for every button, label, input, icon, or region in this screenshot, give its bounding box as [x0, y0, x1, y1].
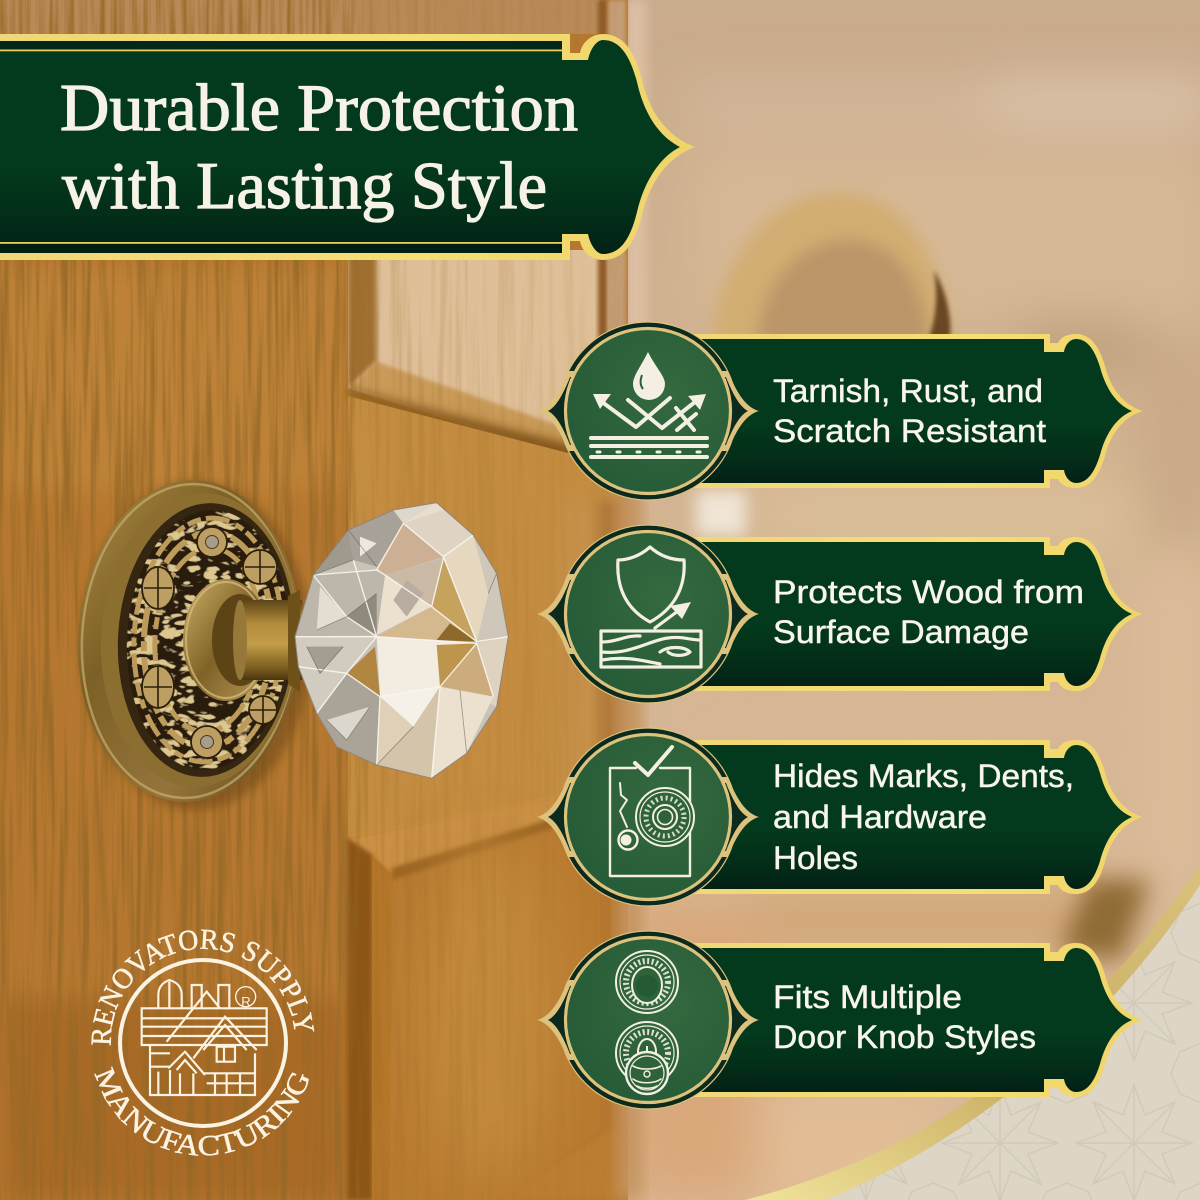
title banner [0, 34, 695, 260]
text 4 [773, 979, 1036, 1055]
crystal knob facets [295, 503, 508, 778]
text 3: and Hardware [773, 799, 987, 835]
feature 3: hides marks [537, 728, 1143, 906]
banner 2 [690, 537, 1143, 691]
decorative cream curved corner [745, 865, 1200, 1200]
door edge [598, 0, 608, 340]
door with wood panels [0, 0, 642, 1200]
blurred interior background [600, 0, 1200, 1200]
banner 4 [690, 943, 1143, 1097]
icon: water drop, arrows and layers [591, 352, 707, 457]
medallion 2 [537, 525, 759, 703]
icon: door with crack, hole, rosette and check [610, 747, 694, 876]
upper panel [348, 250, 610, 470]
feature 2: protects wood [537, 525, 1143, 703]
lower panel [347, 790, 600, 1200]
text 2 [773, 574, 1084, 650]
text 1: Tarnish, Rust, and [773, 373, 1043, 409]
logo top text: RENOVATORS SUPPLY [91, 929, 314, 1046]
icon: shield over wood plank [601, 547, 701, 667]
title text [60, 71, 578, 223]
banner 1 [690, 334, 1143, 488]
middle rail [348, 396, 626, 838]
logo house drawing [142, 980, 267, 1095]
text 3 [773, 758, 1074, 876]
registered mark: R [241, 994, 251, 1009]
text 2: Surface Damage [773, 614, 1029, 650]
arch [712, 192, 950, 345]
door knob [70, 474, 508, 810]
text 1: Scratch Resistant [773, 413, 1046, 449]
title text: with Lasting Style [62, 149, 547, 223]
medallion 1 [537, 322, 759, 500]
text 4: Door Knob Styles [773, 1019, 1036, 1055]
text 3: Holes [773, 840, 858, 876]
icon: two rosette styles [616, 951, 678, 1094]
medallion 4 [537, 931, 759, 1109]
logo: Renovators Supply Manufacturing [91, 929, 314, 1156]
logo bottom text: MANUFACTURING [94, 1066, 309, 1156]
ornate rosette [120, 506, 296, 774]
text 3: Hides Marks, Dents, [773, 758, 1074, 794]
feature 1: tarnish, rust and scratch resistant [537, 322, 1143, 500]
banner 3 [690, 740, 1143, 894]
backplate [70, 474, 311, 810]
text 1 [773, 373, 1046, 449]
text 4: Fits Multiple [773, 979, 962, 1015]
feature 4: fits multiple styles [537, 931, 1143, 1109]
collar and shaft [183, 579, 302, 701]
title text: Durable Protection [60, 71, 578, 145]
text 2: Protects Wood from [773, 574, 1084, 610]
medallion 3 [537, 728, 759, 906]
